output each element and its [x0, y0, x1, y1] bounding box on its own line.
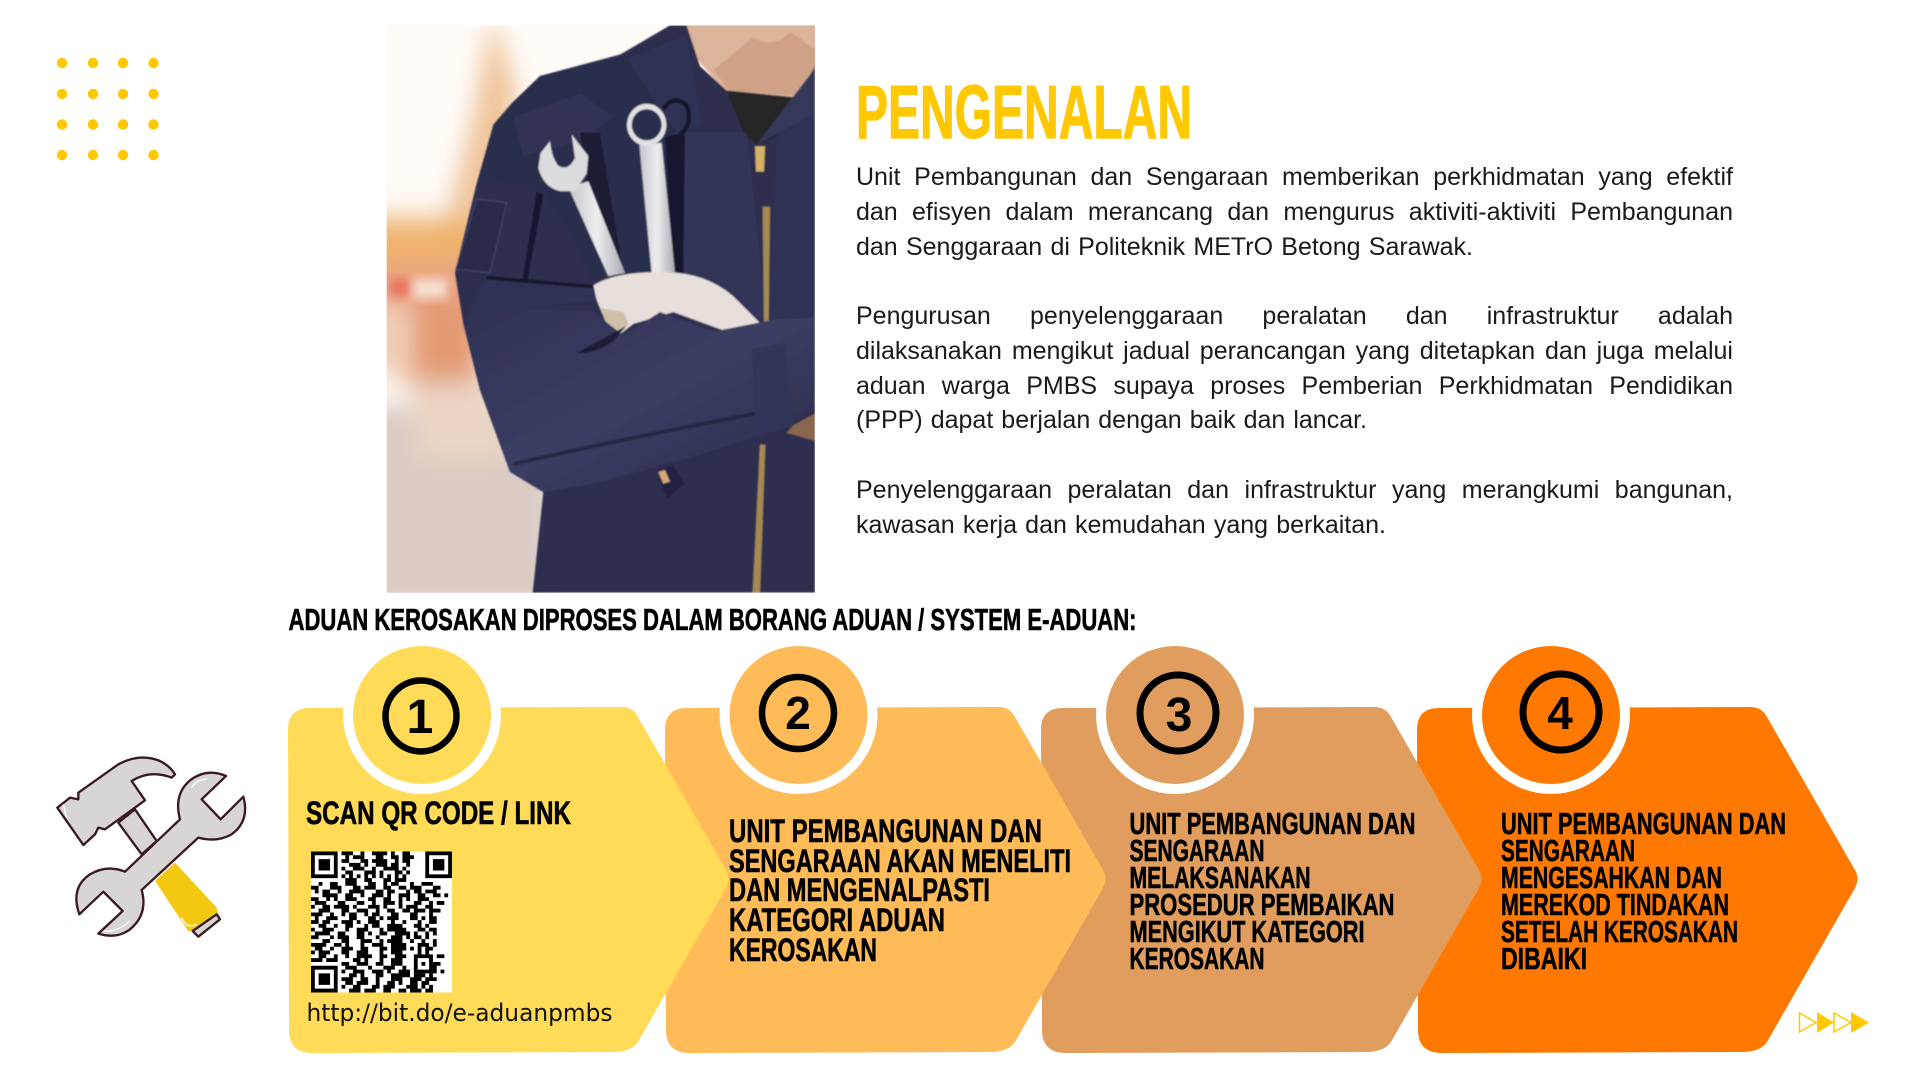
step 3 card: 3	[1166, 689, 1192, 742]
zipper	[763, 207, 770, 324]
paragraph 2: aduan warga PMBS supaya proses Pemberian Perkhidmatan Pendidikan	[856, 372, 1733, 400]
paragraph 3: Penyelenggaraan peralatan dan infrastruktur yang merangkumi bangunan,	[856, 476, 1733, 504]
skin neck	[683, 25, 815, 98]
step 2 card	[665, 636, 1106, 1053]
step 4 card: 4	[1547, 687, 1573, 739]
step 4 card: DIBAIKI	[1501, 941, 1587, 976]
step 3 card	[1041, 636, 1482, 1053]
title: PENGENALAN	[856, 70, 1192, 154]
step 3 card: MENGIKUT KATEGORI	[1130, 914, 1364, 949]
dark pocket	[665, 133, 685, 273]
QR code	[311, 852, 452, 992]
photo: mechanic in navy coverall holding wrenches	[367, 16, 820, 608]
step 1 card: 1	[407, 691, 433, 744]
chest panel	[673, 133, 767, 320]
link text: http://bit.do/e-aduanpmbs	[306, 999, 612, 1027]
paragraph 2: Pengurusan penyelenggaraan peralatan dan infrastruktur adalah	[856, 302, 1733, 330]
step 2 card: KEROSAKAN	[729, 932, 877, 968]
paragraph 1: dan Senggaraan di Politeknik METrO Betong Sarawak.	[856, 232, 1473, 260]
introduction text	[856, 163, 1733, 538]
step 3 card: UNIT PEMBANGUNAN DAN	[1130, 806, 1416, 841]
step 2 card: UNIT PEMBANGUNAN DAN	[729, 813, 1042, 849]
step 3 card: KEROSAKAN	[1130, 941, 1264, 976]
paragraph 1	[856, 163, 1733, 260]
paragraph 3: kawasan kerja dan kemudahan yang berkaitan.	[856, 510, 1386, 538]
crossed forearm	[463, 308, 815, 492]
paragraph 2: (PPP) dapat berjalan dengan baik dan lancar.	[856, 406, 1367, 434]
step 2 card: SENGARAAN AKAN MENELITI	[729, 843, 1071, 879]
step 4 card	[1417, 636, 1858, 1053]
step 1 card	[288, 636, 728, 1053]
step 4 card: UNIT PEMBANGUNAN DAN	[1501, 806, 1786, 841]
step 4 card: MENGESAHKAN DAN	[1501, 860, 1722, 895]
undershirt	[727, 90, 797, 144]
paragraph 3	[856, 476, 1733, 538]
step 2 card: 2	[785, 687, 811, 739]
collar shadow ring	[663, 100, 689, 135]
step 4 card: SENGARAAN	[1501, 833, 1635, 868]
shoulder	[492, 54, 620, 126]
gloves	[592, 272, 761, 339]
coverall body	[455, 25, 815, 593]
icon: row of arrows	[1800, 1012, 1869, 1033]
ring wrench	[639, 143, 675, 273]
icon: crossed hammer and wrench	[57, 758, 245, 937]
paragraph 1: dan efisyen dalam merancang dan mengurus aktiviti-aktiviti Pembangunan	[856, 198, 1733, 226]
paragraph 1: Unit Pembangunan dan Sengaraan memberikan perkhidmatan yang efektif	[856, 163, 1733, 191]
step 4 card: SETELAH KEROSAKAN	[1501, 914, 1738, 949]
step 1 card: SCAN QR CODE / LINK	[306, 795, 571, 831]
paragraph 2	[856, 302, 1733, 434]
cuff	[752, 343, 793, 437]
pocket flap	[456, 199, 507, 273]
decorative dot grid	[57, 58, 159, 160]
step 3 card: MELAKSANAKAN	[1130, 860, 1310, 895]
collar right	[757, 68, 815, 144]
step 3 card: PROSEDUR PEMBAIKAN	[1130, 887, 1394, 922]
process heading: ADUAN KEROSAKAN DIPROSES DALAM BORANG ADUAN / SYSTEM E-ADUAN:	[288, 602, 1136, 637]
step 4 card: MEREKOD TINDAKAN	[1501, 887, 1729, 922]
step 2 card: DAN MENGENALPASTI	[729, 872, 990, 908]
step 3 card: SENGARAAN	[1130, 833, 1264, 868]
open-end wrench	[568, 181, 625, 276]
paragraph 2: dilaksanakan mengikut jadual perancangan yang ditetapkan dan juga melalui	[856, 337, 1733, 365]
step 2 card: KATEGORI ADUAN	[729, 902, 945, 938]
lower detail	[658, 466, 684, 498]
